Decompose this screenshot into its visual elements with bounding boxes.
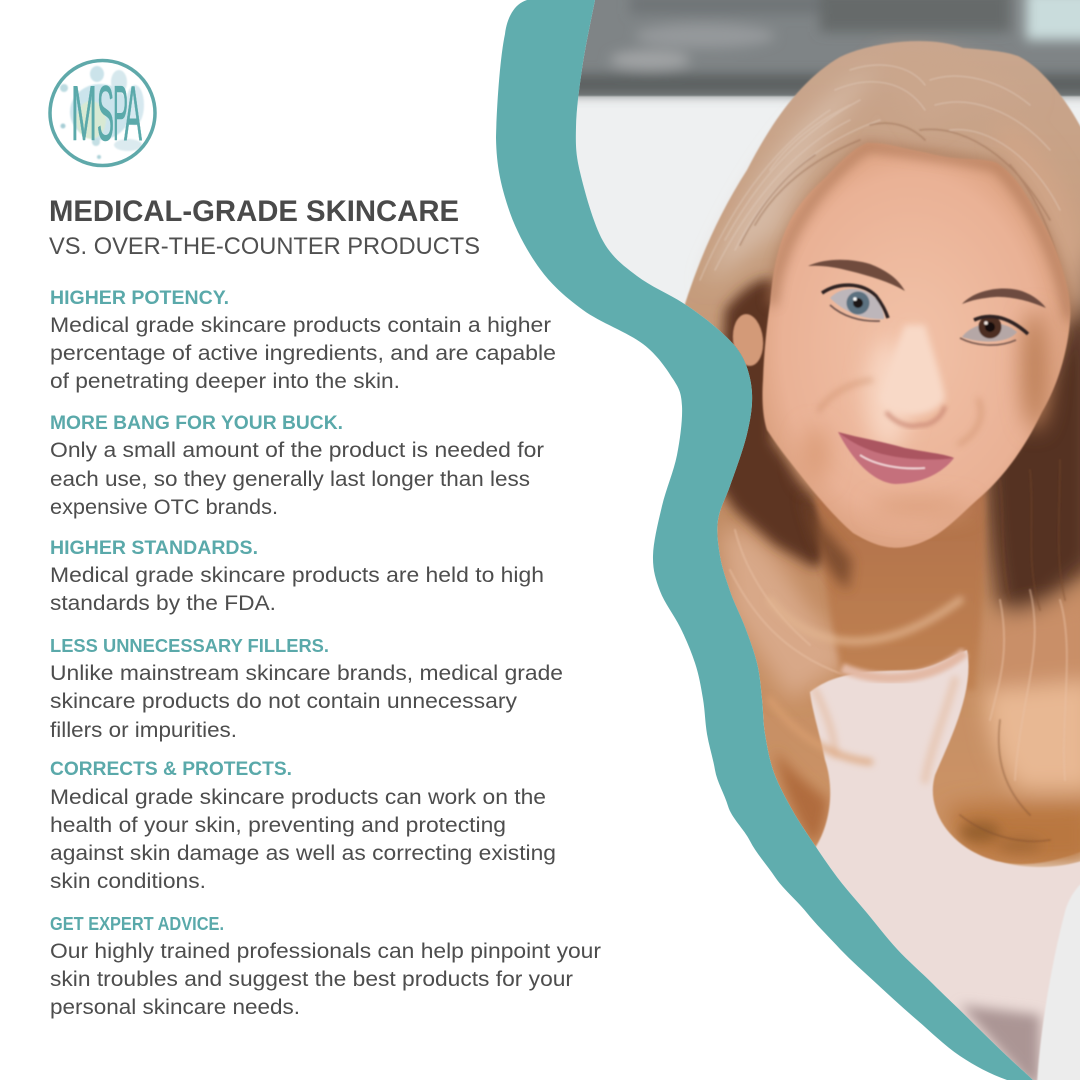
body text: personal skincare needs. [50,995,300,1019]
section: less unnecessary fillers [50,636,563,742]
lips [838,432,954,484]
heading: MORE BANG FOR YOUR BUCK. [50,413,343,434]
neck shadow [806,510,857,591]
body text: expensive OTC brands. [50,495,278,519]
hair soft shading [705,52,1080,868]
body text: fillers or impurities. [50,718,237,742]
body text: Unlike mainstream skincare brands, medical grade [50,661,563,685]
heading: HIGHER STANDARDS. [50,538,258,559]
body text [50,785,556,893]
face [762,143,1070,548]
logo wordmark: M [71,69,97,157]
logo ring [50,60,155,166]
body text: skin conditions. [50,869,206,893]
shirt lower shadow [960,1005,1040,1080]
logo: MSPA circle badge: A [124,69,142,157]
section: more bang for your buck [50,413,544,519]
body text [50,563,544,615]
photo background: blurred shapes in window [560,0,1080,94]
title line 2: VS. OVER-THE-COUNTER PRODUCTS [49,233,480,260]
section: higher standards [50,538,544,615]
photo: smiling woman [560,0,1080,1080]
teal wavy ribbon [496,0,1033,1080]
right eyebrow [962,289,1046,308]
photo background: dark window band [560,0,1080,96]
heading: LESS UNNECESSARY FILLERS. [50,636,329,656]
photo background: bright wall [576,96,1080,304]
body text: standards by the FDA. [50,591,276,615]
body text [50,939,601,1019]
heading: GET EXPERT ADVICE. [50,914,224,934]
shirt collar [842,652,965,678]
face shading [801,310,1049,515]
white sleeve [1037,880,1080,1080]
body text: Our highly trained professionals can help pinpoint your [50,939,601,963]
body text: Medical grade skincare products contain a higher [50,313,551,337]
body text [50,438,544,519]
right eye [960,316,1028,345]
body text: Medical grade skincare products are held to high [50,563,544,587]
heading: CORRECTS & PROTECTS. [50,759,292,780]
logo watercolor splash [60,66,144,159]
body text: Medical grade skincare products can work on the [50,785,546,809]
left eyebrow [808,260,905,291]
shirt [780,650,1080,1080]
nose [880,325,945,426]
section: get expert advice [50,914,601,1019]
body text [50,313,556,393]
body text: skincare products do not contain unnecessary [50,689,517,713]
hair strands [700,65,1068,841]
body text: against skin damage as well as correcting existing [50,841,556,865]
section: higher potency [50,288,556,393]
body text: each use, so they generally last longer than less [50,467,530,491]
logo wordmark: S [97,69,114,157]
neck [815,480,985,690]
section: corrects and protects [50,759,556,893]
logo wordmark: P [113,69,128,157]
title [49,195,480,260]
smile creases [818,380,981,445]
logo: MSPA circle badge [50,60,155,166]
hairline shadow [772,146,1070,320]
ear [732,313,764,367]
body text: Only a small amount of the product is needed for [50,438,544,462]
heading: HIGHER POTENCY. [50,288,229,309]
body text: percentage of active ingredients, and are capable [50,341,556,365]
body text: health of your skin, preventing and protecting [50,813,506,837]
hair dark shading [715,279,1042,852]
body text: of penetrating deeper into the skin. [50,369,400,393]
left eye [822,285,888,321]
hair wisps over shirt and neck [770,600,960,780]
body text: skin troubles and suggest the best products for your [50,967,573,991]
body text [50,661,563,742]
title line 1: MEDICAL-GRADE SKINCARE [49,195,459,228]
hair mass [680,41,1080,864]
